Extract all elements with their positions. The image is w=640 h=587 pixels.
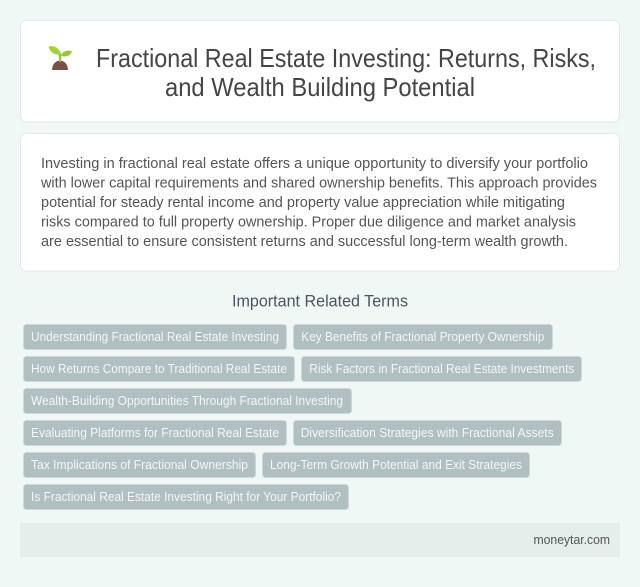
tag: Wealth-Building Opportunities Through Fractional Investing: [31, 393, 343, 408]
heading: related terms: Important Related Terms: [232, 292, 408, 310]
tag: [24, 484, 348, 510]
text block: introduction: with lower capital requirements and shared ownership benefits. This approach provides: [40, 176, 597, 192]
tag: [262, 452, 530, 478]
text block: introduction: are essential to ensure consistent returns and successful long-term wealth growth.: [41, 234, 568, 250]
footer: [20, 523, 620, 557]
panel: introduction: [20, 134, 620, 271]
icon: seedling: [48, 46, 72, 70]
tag: [24, 452, 256, 478]
tag: [294, 420, 562, 446]
tag: Tax Implications of Fractional Ownership: [31, 457, 248, 472]
tag: [24, 356, 294, 382]
tag: Long-Term Growth Potential and Exit Strategies: [270, 457, 522, 472]
tag: How Returns Compare to Traditional Real Estate: [31, 361, 287, 376]
tag: Diversification Strategies with Fractional Assets: [301, 425, 554, 440]
tag: Evaluating Platforms for Fractional Real Estate: [31, 425, 279, 440]
title: and Wealth Building Potential: [165, 72, 475, 102]
footer source: moneytar.com: [534, 533, 610, 547]
text block: introduction: [40, 156, 597, 250]
text block: introduction: Investing in fractional real estate offers a unique opportunity to diversify your portfolio: [41, 156, 588, 172]
title: [96, 43, 596, 102]
panel: header: [20, 20, 620, 122]
tag: [24, 420, 286, 446]
tag: [294, 324, 552, 350]
tag list: [24, 324, 582, 510]
tag: [302, 356, 582, 382]
text block: introduction: risks compared to full property ownership. Proper due diligence and market analysis: [41, 214, 576, 230]
text block: introduction: potential for steady rental income and property value appreciation while mitigating: [41, 195, 565, 211]
tag: Key Benefits of Fractional Property Ownership: [301, 329, 544, 344]
tag: [24, 388, 352, 414]
tag: Risk Factors in Fractional Real Estate Investments: [309, 361, 574, 376]
tag: [24, 324, 286, 350]
tag: Understanding Fractional Real Estate Investing: [31, 329, 279, 344]
title: Fractional Real Estate Investing: Returns, Risks,: [96, 43, 596, 73]
tag: Is Fractional Real Estate Investing Right for Your Portfolio?: [31, 489, 341, 504]
